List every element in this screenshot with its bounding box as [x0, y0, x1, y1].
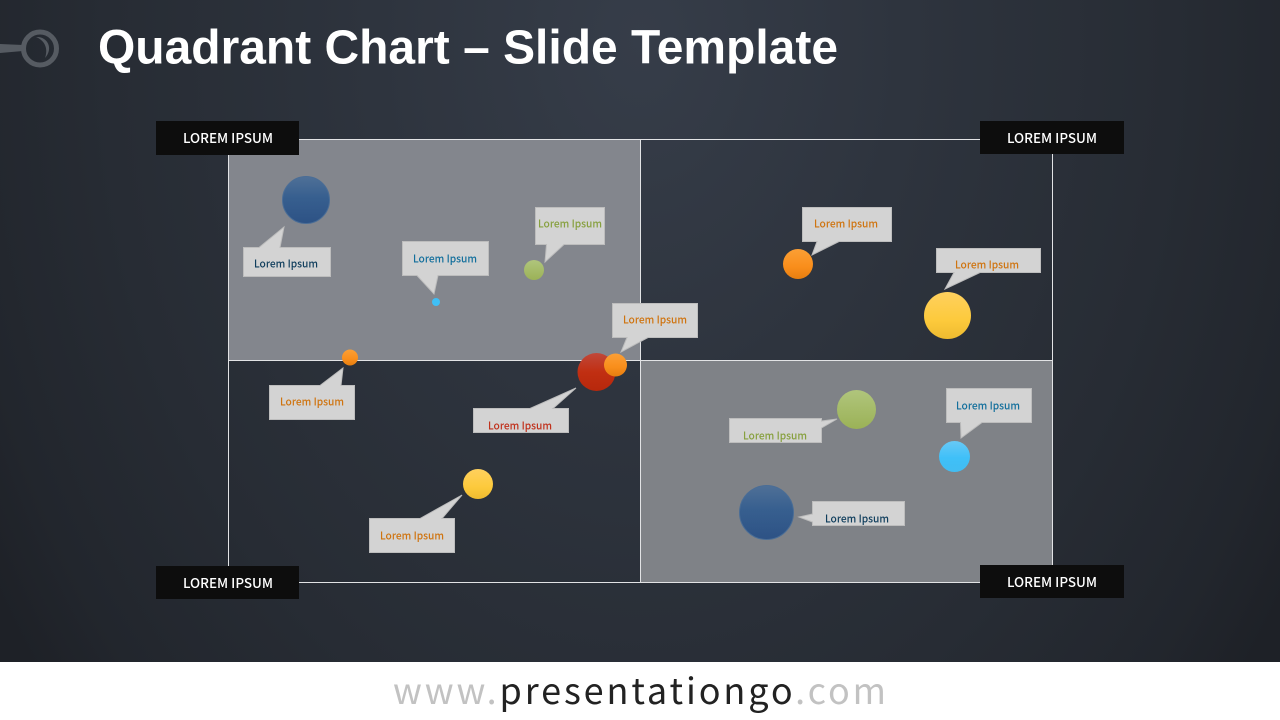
axis label: bottom right: LOREM IPSUM: [1007, 571, 1097, 591]
quadrant: top left: [228, 140, 640, 360]
bubble: orange small, bottom left: [270, 350, 358, 420]
bubble: yellow, bottom left: Lorem Ipsum: [380, 528, 444, 544]
bubble: yellow, top right: [924, 248, 1040, 339]
quadrant: bottom right: [640, 360, 1052, 582]
bubble: navy, bottom right: Lorem Ipsum: [825, 510, 889, 526]
axis label: bottom left: [156, 566, 299, 599]
bubble: navy, top left: Lorem Ipsum: [254, 256, 318, 272]
bubble: orange small, bottom left: Lorem Ipsum: [280, 394, 344, 410]
bubble: green small, top left: Lorem Ipsum: [538, 216, 602, 232]
bubble: navy, bottom right: [740, 486, 904, 540]
bubble: green small, top left: [524, 208, 604, 280]
footer website text: www.presentationgo.com: [393, 663, 886, 715]
axis label: top right: [980, 121, 1124, 154]
axis label: bottom right: [980, 565, 1124, 598]
bubble: orange, centre: Lorem Ipsum: [623, 312, 687, 328]
bubble: orange, top right: [783, 208, 892, 279]
bubble: orange, top right: Lorem Ipsum: [814, 216, 878, 232]
quadrant chart: [228, 140, 1052, 582]
title: Quadrant Chart – Slide Template: [98, 22, 838, 74]
chart frame: [228, 140, 1052, 582]
bubble: yellow, bottom left: [370, 469, 493, 552]
axis label: top right: LOREM IPSUM: [1007, 127, 1097, 147]
bubble: orange, centre: [604, 304, 698, 376]
bubble: cyan small, top left: [402, 242, 488, 306]
bubble: cyan, bottom right: [939, 388, 1032, 472]
bubble: red, centre: [474, 353, 616, 434]
axis label: top left: [156, 121, 299, 155]
logo icon: [0, 32, 56, 65]
bubble: red, centre: Lorem Ipsum: [488, 418, 552, 434]
bubble: green, bottom right: Lorem Ipsum: [743, 428, 807, 444]
bubble: cyan, bottom right: Lorem Ipsum: [956, 398, 1020, 414]
axis label: bottom left: LOREM IPSUM: [183, 572, 273, 592]
footer band: [0, 662, 1280, 720]
bubble: yellow, top right: Lorem Ipsum: [955, 256, 1019, 272]
bubble: cyan small, top left: Lorem Ipsum: [413, 250, 477, 266]
bubble: green, bottom right: [730, 390, 876, 444]
axis label: top left: LOREM IPSUM: [183, 127, 273, 147]
bubble: navy, top left: [244, 176, 330, 276]
